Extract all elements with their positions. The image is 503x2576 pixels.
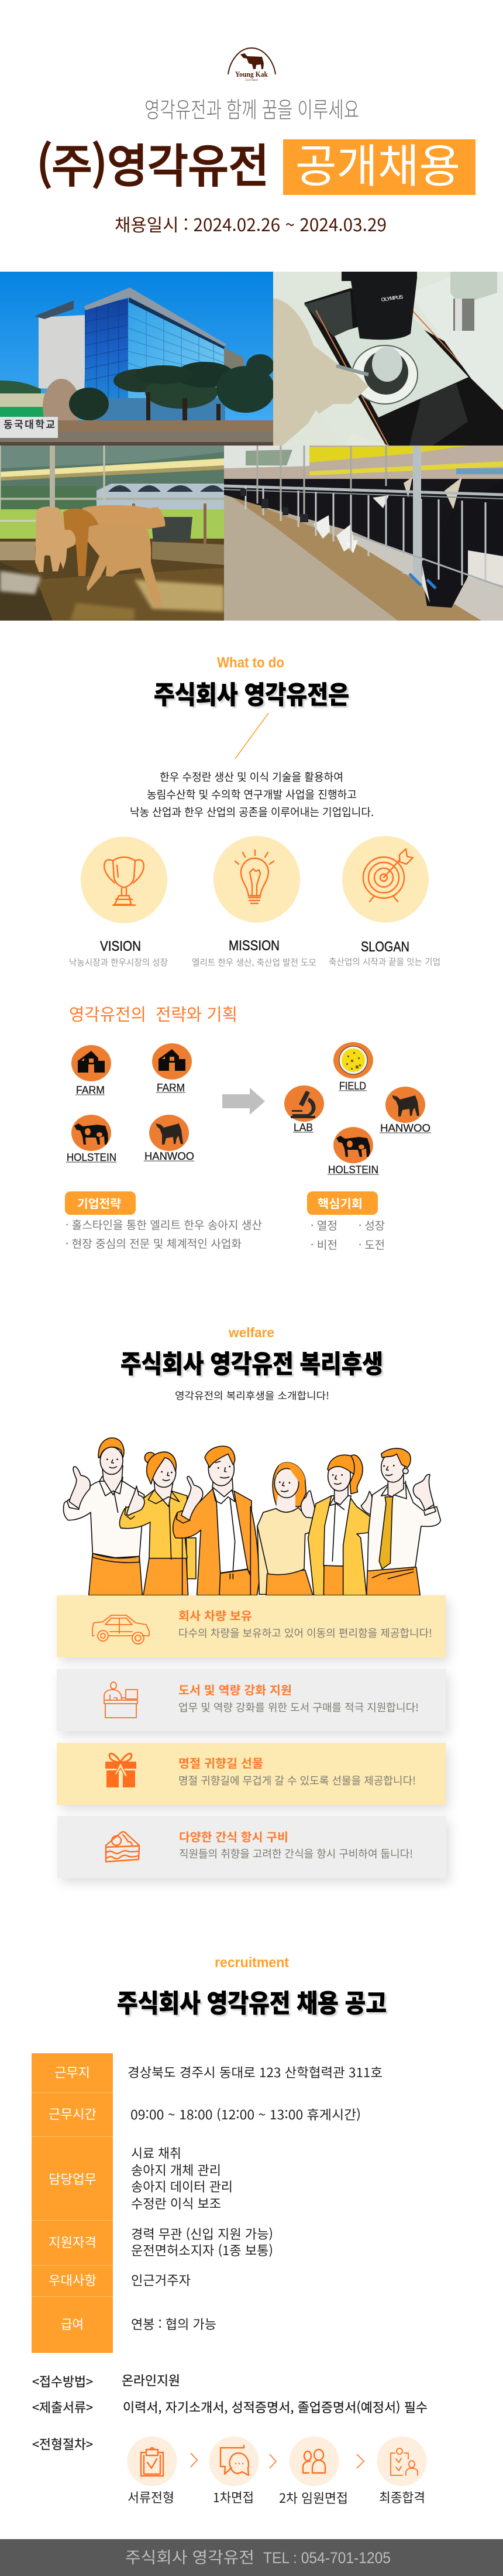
row: duties bbox=[49, 2143, 233, 2212]
row: duties: 수정란 이식 보조 bbox=[131, 2194, 221, 2212]
heading: welfare: 주식회사 영각유전 복리후생 bbox=[120, 1344, 383, 1381]
row: qualifications: 지원자격 bbox=[49, 2232, 97, 2251]
icon: gift box bbox=[105, 1753, 136, 1787]
node: farm 1: FARM bbox=[76, 1084, 105, 1096]
panel: corporate strategy bbox=[65, 1191, 262, 1251]
title: 다양한 간식 항시 구비 bbox=[179, 1828, 288, 1845]
row: qualifications bbox=[49, 2224, 273, 2259]
strategy list: · 현장 중심의 전문 및 체계적인 사업화 bbox=[66, 1235, 242, 1251]
section: welfare heading bbox=[120, 1325, 383, 1402]
company description bbox=[130, 769, 374, 820]
step: final pass bbox=[377, 2437, 427, 2506]
telephone: TEL : 054-701-1205 bbox=[263, 2549, 391, 2567]
application method: 온라인지원 bbox=[122, 2371, 180, 2389]
icon: light bulb bbox=[235, 850, 274, 903]
mission description: 엘리트 한우 생산, 축산업 발전 도모 bbox=[192, 956, 316, 968]
arrow: transition bbox=[222, 1088, 265, 1115]
row: salary bbox=[61, 2314, 216, 2333]
icon: car bbox=[92, 1615, 149, 1644]
slogan description: 축산업의 시작과 끝을 잇는 기업 bbox=[329, 955, 440, 968]
row: location: 근무지 bbox=[54, 2063, 90, 2081]
logo: Young Kak: Young Kak bbox=[235, 70, 268, 78]
row: qualifications: 경력 무관 (신입 지원 가능) bbox=[131, 2224, 273, 2243]
description: 직원들의 취향을 고려한 간식을 항시 구비하여 둡니다! bbox=[179, 1846, 413, 1861]
title: 명절 귀향길 선물 bbox=[178, 1754, 263, 1771]
campus sign bbox=[0, 416, 58, 438]
panel: vision bbox=[69, 837, 168, 968]
arrow bbox=[191, 2453, 197, 2467]
photo: hanwoo calves bbox=[0, 446, 224, 621]
heading: company: 주식회사 영각유전은 bbox=[154, 675, 349, 711]
strategy list bbox=[66, 1217, 262, 1251]
illustration: six employees thumbs up bbox=[63, 1438, 440, 1595]
footer bbox=[0, 2539, 503, 2576]
node: hanwoo: HANWOO bbox=[144, 1150, 194, 1162]
main title: (주)영각유전 bbox=[37, 130, 269, 196]
step: final pass: 최종합격 bbox=[379, 2488, 425, 2506]
panel: core values bbox=[307, 1191, 385, 1252]
row: qualifications: 운전면허소지자 (1종 보통) bbox=[131, 2241, 273, 2259]
tagline: 영각유전과 함께 꿈을 이루세요 bbox=[144, 92, 359, 124]
row: hours: 09:00 ~ 18:00 (12:00 ~ 13:00 휴게시간) bbox=[130, 2105, 361, 2123]
card: holiday gifts bbox=[57, 1743, 446, 1805]
description: 명절 귀향길에 무겁게 갈 수 있도록 선물을 제공합니다! bbox=[178, 1773, 416, 1788]
photo: embryo microscope bbox=[273, 258, 503, 446]
card: books and training bbox=[57, 1669, 446, 1731]
icon: target bbox=[363, 849, 413, 902]
photo: holstein barn bbox=[224, 446, 503, 621]
node: field bbox=[333, 1042, 373, 1092]
label: SLOGAN: SLOGAN bbox=[361, 939, 409, 955]
node: holstein bbox=[328, 1127, 379, 1176]
node: farm 2 bbox=[152, 1043, 192, 1094]
recruitment dates: 채용일시 : 2024.02.26 ~ 2024.03.29 bbox=[115, 211, 387, 237]
company name: 주식회사 영각유전 bbox=[125, 2545, 254, 2568]
logo: Young Kak bbox=[228, 48, 275, 82]
welfare intro: 영각유전의 복리후생을 소개합니다! bbox=[175, 1388, 329, 1402]
row: hours bbox=[49, 2104, 361, 2123]
step: first interview bbox=[209, 2437, 259, 2506]
card: company vehicles bbox=[57, 1595, 446, 1657]
values list bbox=[311, 1217, 385, 1252]
title: 회사 차량 보유 bbox=[178, 1606, 252, 1623]
step: executive interview: 2차 임원면접 bbox=[279, 2488, 348, 2507]
required documents: 이력서, 자기소개서, 성적증명서, 졸업증명서(예정서) 필수 bbox=[123, 2397, 428, 2416]
node: hanwoo: HANWOO bbox=[380, 1122, 430, 1134]
node: lab: LAB bbox=[294, 1122, 313, 1133]
node: field: FIELD bbox=[339, 1080, 366, 1092]
row: preference bbox=[49, 2270, 191, 2289]
left trio bbox=[63, 1438, 252, 1595]
company description: 농림수산학 및 수의학 연구개발 사업을 진행하고 bbox=[147, 787, 357, 802]
strategy diagram: after bbox=[284, 1042, 431, 1176]
step: executive interview bbox=[279, 2437, 348, 2507]
node: holstein bbox=[66, 1115, 116, 1163]
panel: mission bbox=[192, 836, 316, 968]
company description: 한우 수정란 생산 및 이식 기술을 활용하여 bbox=[160, 769, 343, 785]
step: document screening: 서류전형 bbox=[128, 2488, 174, 2506]
vision description: 낙농시장과 한우시장의 성장 bbox=[69, 956, 168, 968]
node: farm 1 bbox=[71, 1045, 111, 1096]
logo: Young Kak: Live Stock bbox=[246, 79, 259, 82]
row: preference: 인근거주자 bbox=[131, 2270, 191, 2289]
eyebrow: recruitment: recruitment bbox=[215, 1955, 289, 1971]
heading: strategy: 영각유전의 전략와 기획 bbox=[69, 1001, 237, 1026]
badge: 공개채용: 공개채용 bbox=[295, 130, 460, 196]
row: location: 경상북도 경주시 동대로 123 산학협력관 311호 bbox=[128, 2063, 383, 2081]
table: job details bbox=[32, 2053, 383, 2353]
values list: · 비전 bbox=[311, 1236, 337, 1252]
panel: slogan bbox=[329, 836, 440, 968]
icon: cake slice bbox=[106, 1832, 139, 1862]
application method bbox=[32, 2371, 180, 2390]
row: duties: 담당업무 bbox=[49, 2169, 97, 2188]
label: VISION: VISION bbox=[100, 938, 141, 954]
application method: <접수방법> bbox=[32, 2372, 93, 2390]
row: salary: 연봉 : 협의 가능 bbox=[131, 2314, 216, 2333]
values list: · 도전 bbox=[359, 1236, 385, 1252]
card: snacks bbox=[57, 1816, 446, 1878]
header block bbox=[37, 48, 476, 237]
row: duties: 송아지 데이터 관리 bbox=[131, 2177, 233, 2195]
node: holstein: HOLSTEIN bbox=[328, 1164, 378, 1176]
badge: 기업전략: 기업전략 bbox=[77, 1194, 121, 1211]
strategy diagram: before bbox=[66, 1043, 194, 1163]
strategy list: · 홀스타인을 통한 엘리트 한우 송아지 생산 bbox=[66, 1217, 262, 1232]
row: salary: 급여 bbox=[61, 2314, 84, 2333]
row: hours: 근무시간 bbox=[49, 2104, 97, 2123]
icon: person at desk bbox=[104, 1682, 137, 1718]
heading: recruitment notice: 주식회사 영각유전 채용 공고 bbox=[117, 1984, 387, 2020]
values list: · 성장 bbox=[359, 1217, 385, 1233]
node: holstein: HOLSTEIN bbox=[67, 1152, 116, 1163]
values list: · 열정 bbox=[311, 1217, 337, 1233]
step: first interview: 1차면접 bbox=[213, 2488, 254, 2506]
arrow bbox=[357, 2454, 364, 2468]
row: preference: 우대사항 bbox=[49, 2270, 97, 2289]
arrow bbox=[270, 2454, 276, 2468]
campus sign: 동국대학교 bbox=[4, 416, 55, 431]
table label column bbox=[32, 2053, 113, 2353]
badge: 기업전략 bbox=[65, 1191, 136, 1215]
company description: 낙농 산업과 한우 산업의 공존을 이루어내는 기업입니다. bbox=[130, 804, 374, 820]
selection process bbox=[32, 2434, 427, 2507]
node: lab bbox=[284, 1085, 324, 1133]
required documents: <제출서류> bbox=[32, 2397, 93, 2416]
icon: trophy bbox=[104, 857, 144, 905]
step: document screening bbox=[128, 2437, 177, 2506]
row: duties: 송아지 개체 관리 bbox=[131, 2160, 221, 2179]
right trio bbox=[250, 1448, 440, 1595]
node: farm 2: FARM bbox=[157, 1082, 185, 1094]
node: hanwoo bbox=[144, 1115, 194, 1162]
badge: 핵심기회: 핵심기회 bbox=[318, 1194, 363, 1211]
description: 업무 및 역량 강화를 위한 도서 구매를 적극 지원합니다! bbox=[178, 1700, 419, 1715]
label: MISSION: MISSION bbox=[229, 938, 280, 954]
description: 다수의 차량을 보유하고 있어 이동의 편리함을 제공합니다! bbox=[178, 1625, 432, 1640]
eyebrow: What to do: What to do bbox=[217, 655, 284, 671]
node: hanwoo bbox=[380, 1087, 431, 1134]
photo: embryo microscope: OLYMPUS bbox=[381, 294, 404, 303]
photo: university building bbox=[0, 272, 275, 446]
row: duties: 시료 채취 bbox=[131, 2143, 181, 2162]
label: process: <전형절차> bbox=[32, 2434, 93, 2453]
title: 도서 및 역량 강화 지원 bbox=[178, 1681, 292, 1698]
section: what to do bbox=[130, 655, 374, 820]
section: recruitment heading bbox=[117, 1955, 387, 2020]
eyebrow: welfare: welfare bbox=[228, 1325, 274, 1340]
